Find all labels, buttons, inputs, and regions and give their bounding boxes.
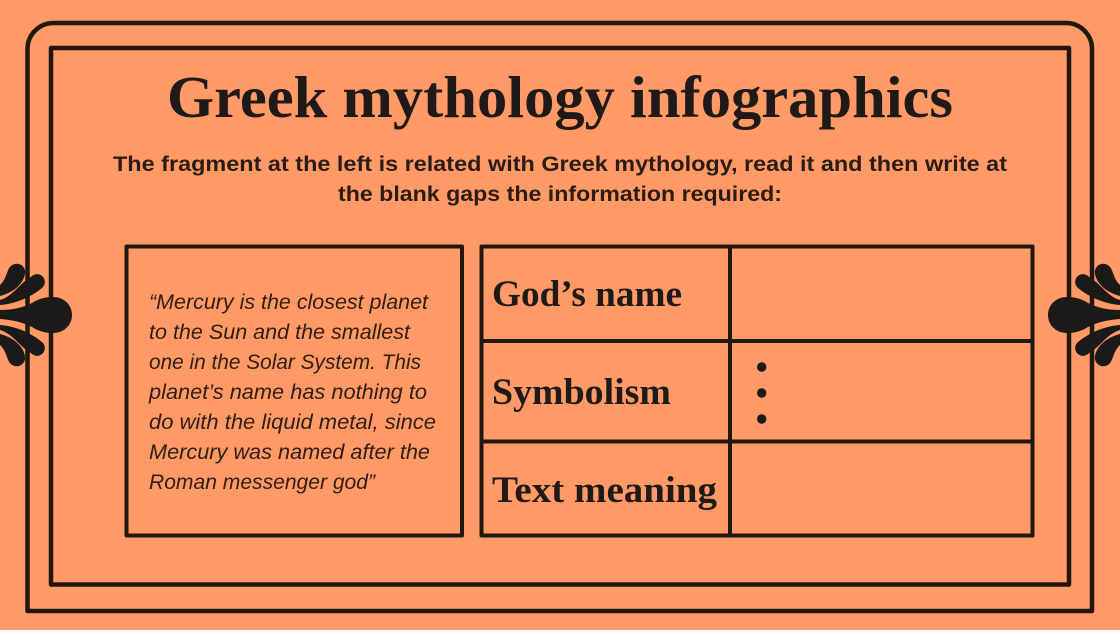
bullet points: [757, 362, 766, 424]
row label: god's name: God’s name: [492, 273, 682, 314]
quote text: [148, 291, 436, 494]
panel: table: [480, 245, 1034, 537]
quote text: planet’s name has nothing to: [148, 381, 427, 404]
quote text: Mercury was named after the: [149, 441, 430, 464]
right ornament: [1048, 264, 1120, 366]
row label: symbolism: Symbolism: [492, 371, 671, 412]
quote text: do with the liquid metal, since: [149, 411, 436, 434]
quote text: Roman messenger god”: [149, 471, 376, 494]
left ornament: [0, 264, 72, 366]
quote text: to the Sun and the smallest: [149, 321, 411, 344]
quote text: one in the Solar System. This: [149, 351, 421, 374]
quote text: “Mercury is the closest planet: [149, 291, 429, 314]
panel: quote fragment: [126, 246, 462, 536]
row label: text meaning: Text meaning: [492, 469, 717, 510]
instructions text: The fragment at the left is related with Greek mythology, read it and then write at: [113, 152, 1007, 176]
inner frame: [51, 48, 1069, 584]
title: Greek mythology infographics: [167, 64, 953, 130]
instructions text: [113, 152, 1007, 206]
instructions text: the blank gaps the information required:: [338, 182, 782, 206]
